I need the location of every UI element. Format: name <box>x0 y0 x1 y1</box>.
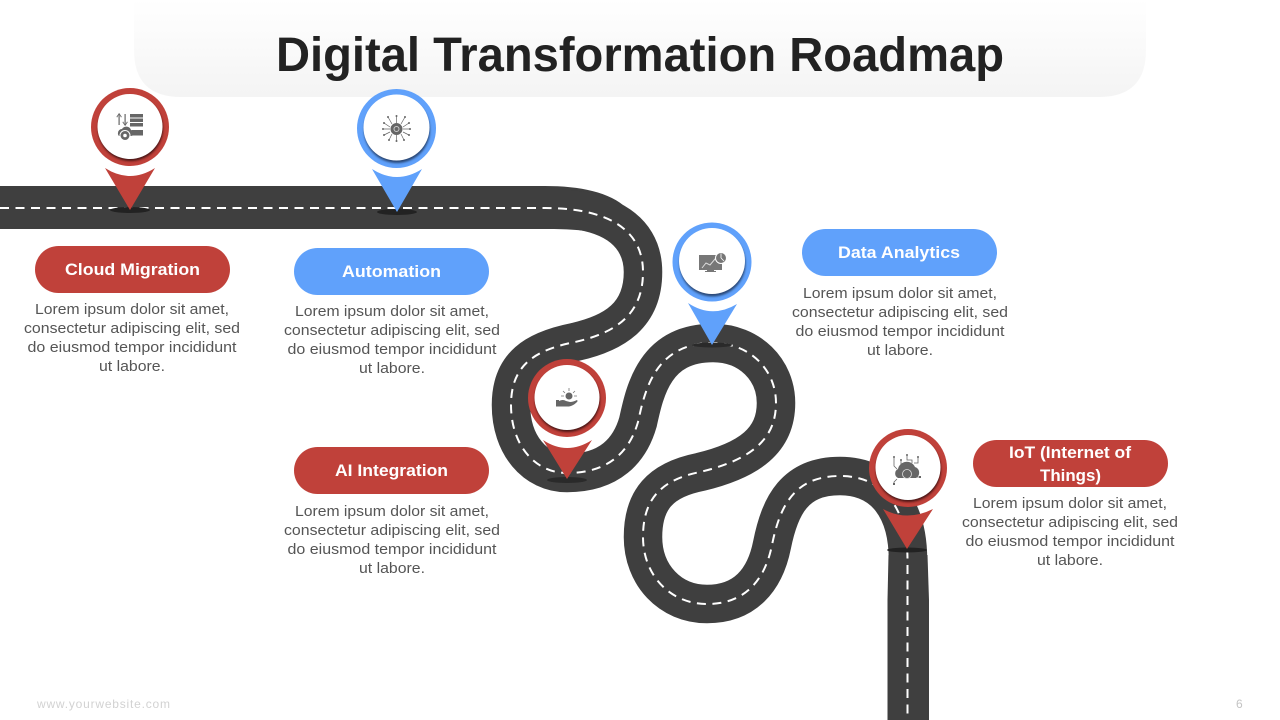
text: ai integration description <box>284 503 500 577</box>
label: iot: IoT (Internet of <box>1009 443 1131 462</box>
road centre line <box>0 208 908 720</box>
pin: cloud migration <box>91 88 169 213</box>
text: data analytics description: Lorem ipsum dolor sit amet, <box>803 285 997 302</box>
winding road <box>0 186 929 720</box>
label: data analytics: Data Analytics <box>838 243 960 262</box>
label: cloud migration <box>35 246 230 293</box>
text: ai integration description: do eiusmod tempor incididunt <box>288 541 497 558</box>
text: automation description: Lorem ipsum dolor sit amet, <box>295 303 489 320</box>
label: automation <box>294 248 489 295</box>
icon: cloud server <box>116 113 143 140</box>
label: iot: Things) <box>1040 466 1101 485</box>
text: cloud migration description: consectetur adipiscing elit, sed <box>24 320 240 337</box>
label: ai integration <box>294 447 489 494</box>
text: ai integration description: ut labore. <box>359 560 425 577</box>
text: automation description: do eiusmod tempor incididunt <box>288 341 497 358</box>
pin: iot <box>869 429 947 552</box>
label: data analytics <box>802 229 997 276</box>
icon: monitor chart <box>699 252 726 272</box>
page number: 6 <box>1236 697 1243 711</box>
icon: gear network <box>382 115 411 142</box>
pin: data analytics <box>672 222 752 348</box>
text: iot description: Lorem ipsum dolor sit amet, <box>973 495 1167 512</box>
text: iot description: consectetur adipiscing elit, sed <box>962 514 1178 531</box>
pin: automation <box>357 89 436 215</box>
text: ai integration description: Lorem ipsum dolor sit amet, <box>295 503 489 520</box>
footer website: www.yourwebsite.com <box>36 697 170 711</box>
text: data analytics description <box>792 285 1008 359</box>
text: cloud migration description: ut labore. <box>99 358 165 375</box>
text: cloud migration description: do eiusmod tempor incididunt <box>28 339 237 356</box>
icon: cloud circuit <box>893 454 921 485</box>
text: cloud migration description <box>24 301 240 375</box>
label: ai integration: AI Integration <box>335 461 448 480</box>
icon: hand with gear <box>556 388 578 406</box>
text: data analytics description: do eiusmod tempor incididunt <box>796 323 1005 340</box>
text: data analytics description: ut labore. <box>867 342 933 359</box>
label: iot <box>973 440 1168 487</box>
label: cloud migration: Cloud Migration <box>65 260 200 279</box>
label: automation: Automation <box>342 262 441 281</box>
text: iot description: do eiusmod tempor incididunt <box>966 533 1175 550</box>
text: iot description <box>962 495 1178 569</box>
text: cloud migration description: Lorem ipsum dolor sit amet, <box>35 301 229 318</box>
title banner <box>134 0 1146 97</box>
text: automation description <box>284 303 500 377</box>
text: iot description: ut labore. <box>1037 552 1103 569</box>
text: automation description: consectetur adipiscing elit, sed <box>284 322 500 339</box>
text: data analytics description: consectetur adipiscing elit, sed <box>792 304 1008 321</box>
text: automation description: ut labore. <box>359 360 425 377</box>
title: Digital Transformation Roadmap <box>276 29 1004 82</box>
text: ai integration description: consectetur adipiscing elit, sed <box>284 522 500 539</box>
pin: ai integration <box>528 359 606 483</box>
